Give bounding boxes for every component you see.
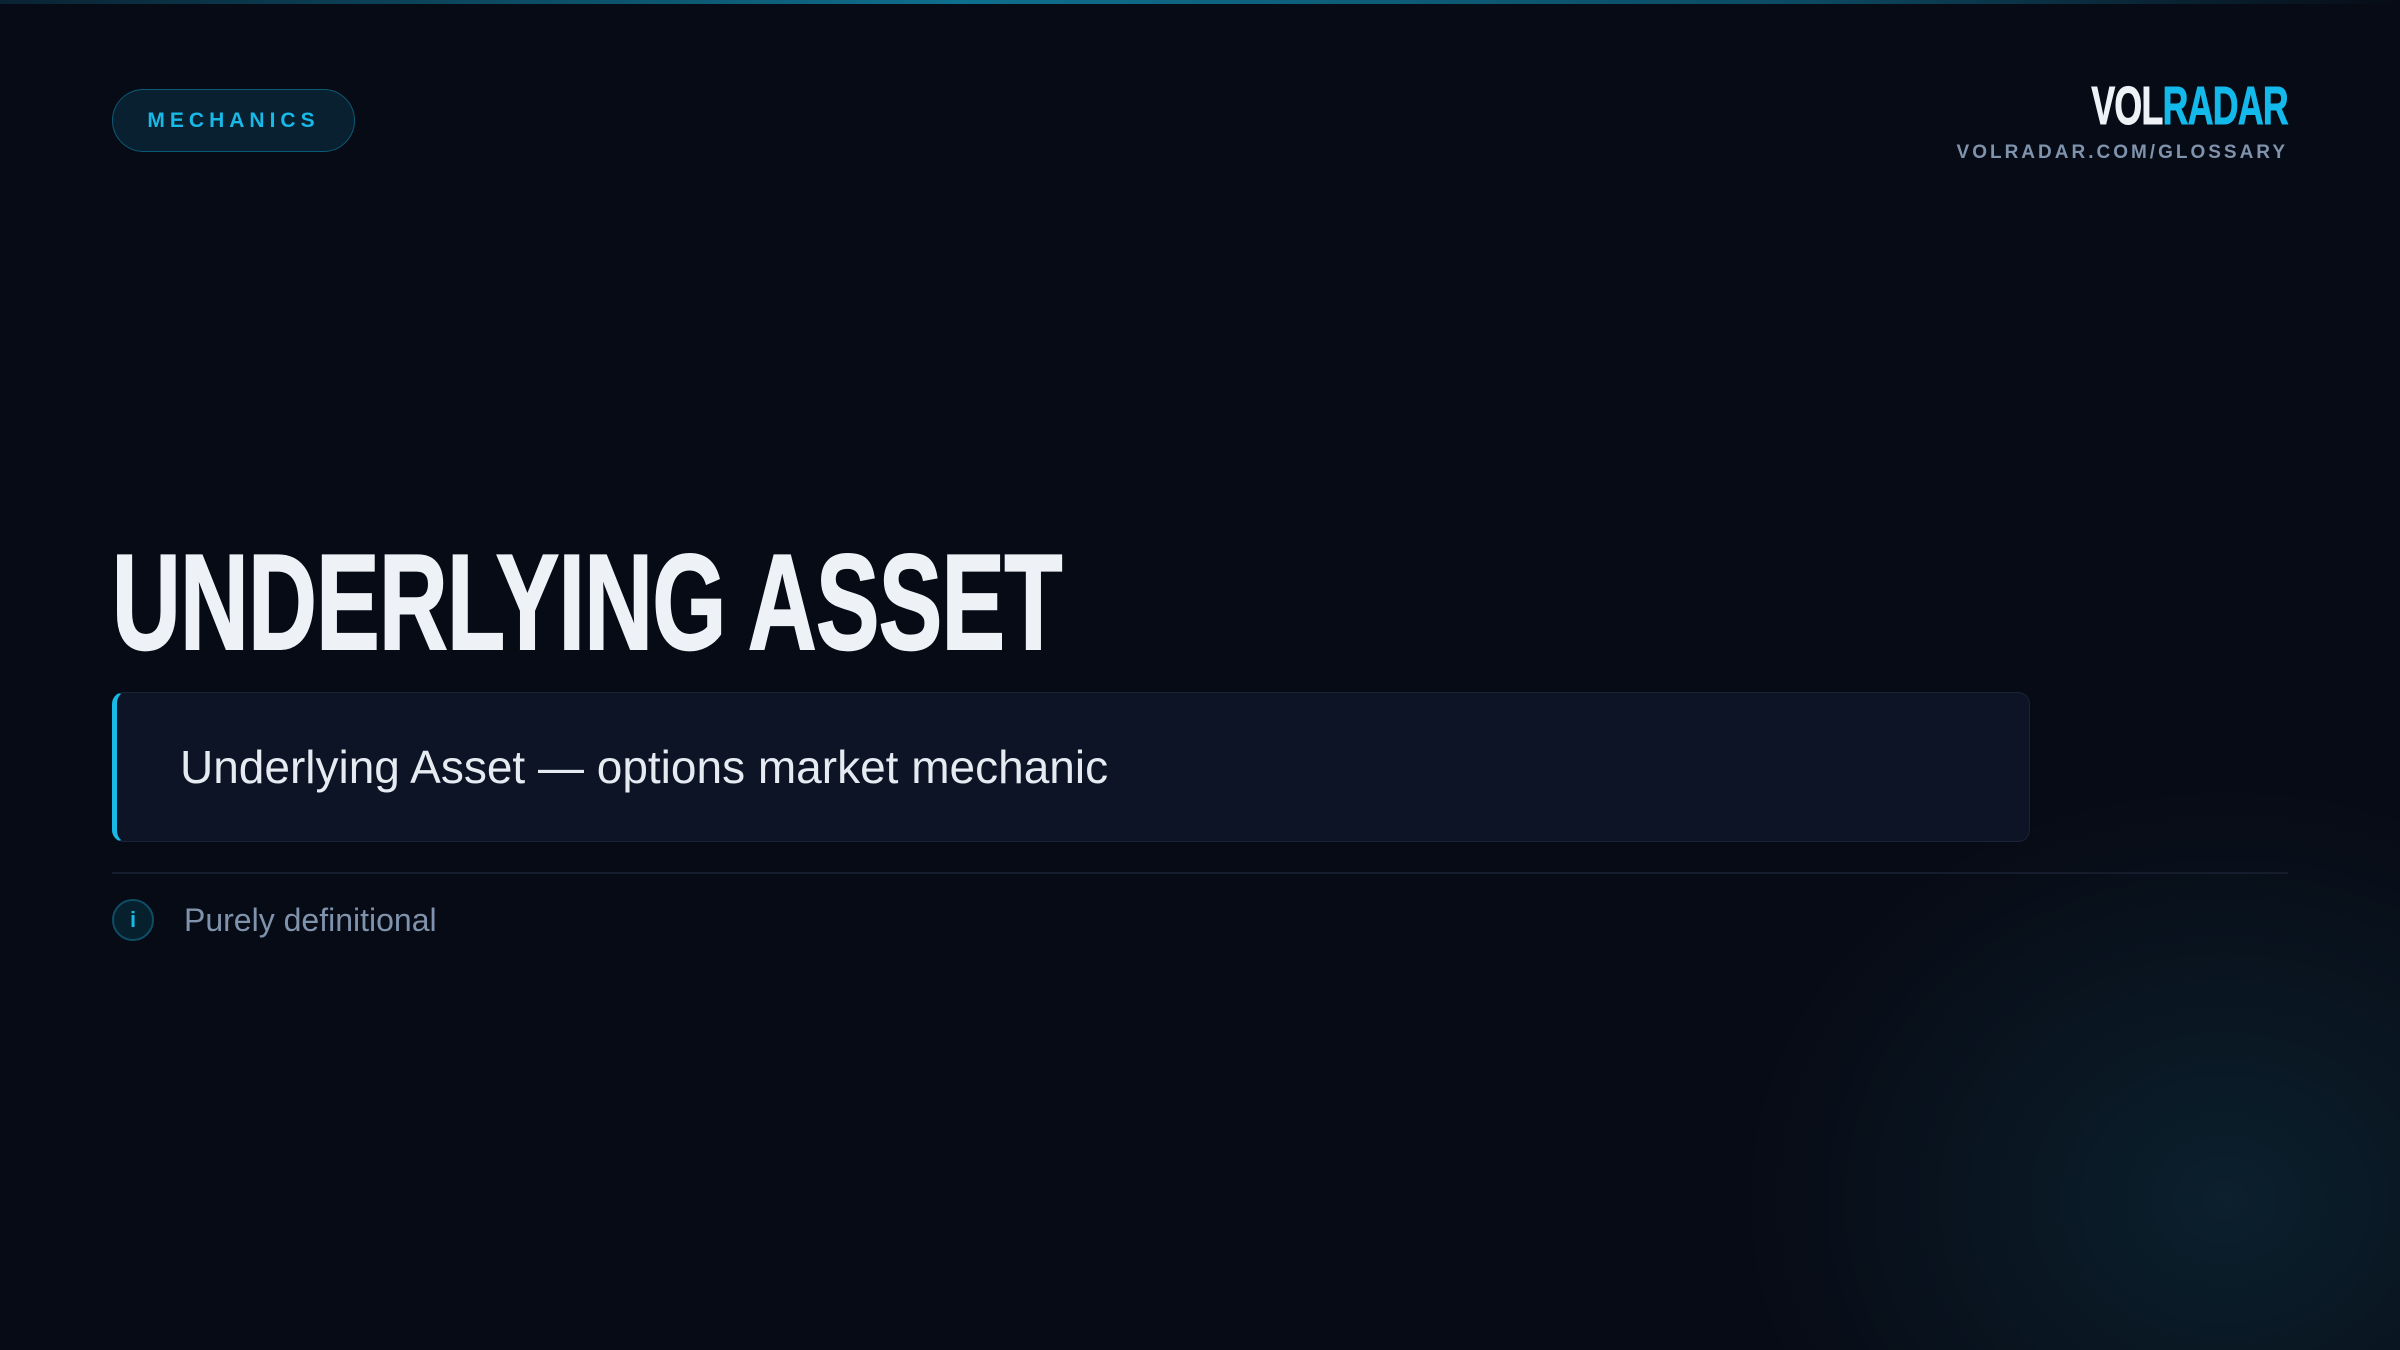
badge: mechanics <box>112 89 355 152</box>
badge: mechanics: MECHANICS <box>147 108 320 132</box>
definition box: Underlying Asset — options market mechanic <box>180 741 1108 793</box>
url: VOLRADAR.COM/GLOSSARY <box>1957 142 2288 163</box>
note text: Purely definitional <box>184 902 437 938</box>
title: UNDERLYING ASSET <box>112 526 1062 678</box>
icon: info <box>112 899 154 941</box>
icon: info: i <box>130 907 136 932</box>
logo: VOLRADAR <box>2091 76 2288 136</box>
definition box <box>112 692 2030 842</box>
